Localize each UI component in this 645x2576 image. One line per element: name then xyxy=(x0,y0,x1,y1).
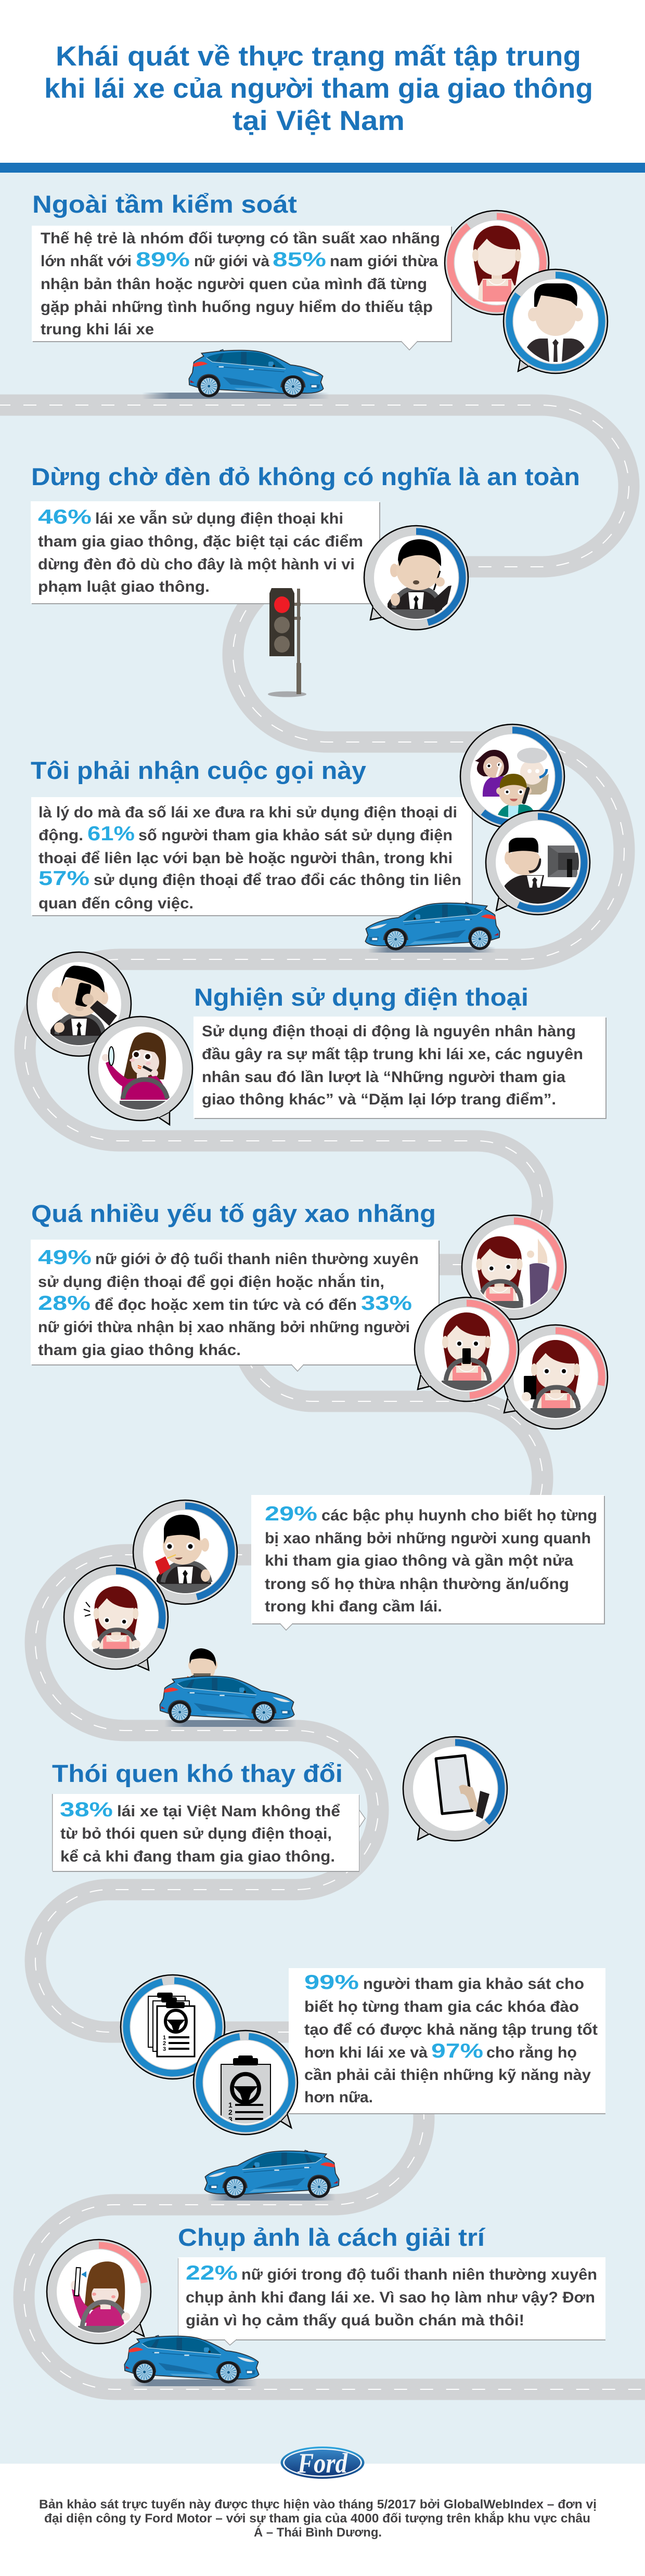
heading: Nghiện sử dụng điện thoại: Nghiện sử dụng điện thoại xyxy=(194,983,528,1011)
panel: text box 1: gặp phải những tình huống nguy hiểm do thiếu tập xyxy=(41,298,433,316)
panel: text box 1: nữ giới và xyxy=(194,253,269,270)
avatar: woman distracted by passenger 33% xyxy=(462,1215,566,1319)
panel: text box 2: tham gia giao thông, đặc biệt tại các điểm xyxy=(38,533,363,550)
panel: text box 5: tham gia giao thông khác. xyxy=(38,1342,241,1359)
panel: text box 7: 38% xyxy=(60,1799,113,1821)
panel: text box 5: để đọc hoặc xem tin tức và có đến xyxy=(95,1296,357,1313)
panel: text box 1: Thế hệ trẻ là nhóm đối tượng có tần suất xao nhãng xyxy=(41,230,440,247)
panel: text box 8: hơn khi lái xe và xyxy=(304,2044,428,2061)
panel: text box 8: hơn nữa. xyxy=(304,2089,373,2106)
avatar: office worker on phone 57% xyxy=(486,811,590,915)
footer background xyxy=(0,2464,645,2576)
avatar: clipboards 99% xyxy=(121,1975,225,2079)
panel: text box 1 xyxy=(32,226,452,350)
panel: text box 2: 46% xyxy=(38,506,92,528)
panel: text box 3: 61% xyxy=(87,823,135,845)
panel: text box 6: trong số họ thừa nhận thường ăn/uống xyxy=(265,1576,569,1593)
panel: text box 6: trong khi đang cầm lái. xyxy=(265,1598,442,1615)
panel: text box 4 xyxy=(194,1017,607,1119)
panel: text box 1: lớn nhất với xyxy=(41,253,132,270)
footer note: Á – Thái Bình Dương. xyxy=(254,2525,382,2540)
panel: text box 5: 28% xyxy=(38,1292,91,1315)
header band xyxy=(0,163,645,173)
avatar: family 61% xyxy=(460,724,564,828)
avatar: clipboard 97%: 1 xyxy=(228,2101,233,2109)
panel: text box 6 xyxy=(251,1495,605,1630)
panel: text box 1: 85% xyxy=(273,249,326,271)
avatar: woman 89% xyxy=(445,211,549,315)
panel: text box 5: nữ giới ở độ tuổi thanh niên thường xuyên xyxy=(95,1251,419,1268)
avatar: woman phone in hand 28% xyxy=(504,1325,608,1429)
panel: text box 2: lái xe vẫn sử dụng điện thoại khi xyxy=(95,510,343,527)
panel: text box 8: cần phải cải thiện những kỹ năng này xyxy=(304,2066,591,2084)
footer note xyxy=(39,2497,597,2540)
panel: text box 9: giản vì họ cảm thấy quá buồn chán mà thôi! xyxy=(186,2312,524,2329)
panel: text box 8: cho rằng họ xyxy=(486,2044,577,2061)
avatar: clipboards 99%: 3 xyxy=(163,2046,166,2052)
panel: text box 5 xyxy=(31,1240,440,1371)
panel: text box 4: nhân sau đó lần lượt là “Những người tham gia xyxy=(202,1069,565,1086)
heading: Ngoài tầm kiểm soát: Ngoài tầm kiểm soát xyxy=(32,190,297,218)
avatar: woman phone at mouth 49% xyxy=(415,1297,519,1401)
avatar: woman with lipstick xyxy=(88,1017,192,1125)
avatar: clipboard 97% xyxy=(194,2031,298,2135)
panel: text box 7: từ bỏ thói quen sử dụng điện thoại, xyxy=(60,1825,332,1842)
avatar: selfie woman 22% xyxy=(47,2240,151,2344)
panel: text box 9: nữ giới trong độ tuổi thanh niên thường xuyên xyxy=(241,2266,597,2283)
avatar: driver on phone 46% xyxy=(364,526,468,630)
car 2 xyxy=(365,902,500,953)
Ford logo: Ford xyxy=(297,2448,348,2479)
avatar: woman distracted 29% xyxy=(64,1565,168,1670)
panel: text box 2 xyxy=(31,501,380,604)
panel: text box 7: lái xe tại Việt Nam không thể xyxy=(117,1803,340,1820)
heading: Dừng chờ đèn đỏ: Dừng chờ đèn đỏ không có nghĩa là an toàn xyxy=(31,463,580,490)
avatar: clipboards 99%: 2 xyxy=(163,2040,166,2047)
panel: text box 9: 22% xyxy=(186,2262,238,2284)
panel: text box 4: đầu gây ra sự mất tập trung khi lái xe, các nguyên xyxy=(202,1046,583,1063)
icon: traffic light xyxy=(268,588,306,697)
panel: text box 1: 89% xyxy=(136,249,190,271)
panel: text box 4: giao thông khác” và “Dặm lại lớp trang điểm”. xyxy=(202,1091,556,1108)
panel: text box 8: 97% xyxy=(431,2040,483,2062)
panel: text box 6: bị xao nhãng bởi những người xung quanh xyxy=(265,1530,591,1547)
avatar: man 85% xyxy=(504,269,608,373)
heading: Tôi phải nhận cuộc gọi này: Tôi phải nhận cuộc gọi này xyxy=(31,757,366,784)
panel: text box 5: sử dụng điện thoại để gọi điện hoặc nhắn tin, xyxy=(38,1273,384,1291)
panel: text box 5: 33% xyxy=(361,1292,412,1315)
avatar: phone 38% xyxy=(403,1737,507,1841)
title xyxy=(44,41,593,136)
panel: text box 8 xyxy=(289,1968,605,2114)
heading: Chụp ảnh là cách giải trí: Chụp ảnh là cách giải trí xyxy=(178,2223,486,2251)
car 5 xyxy=(124,2335,259,2386)
panel: text box 6: khi tham gia giao thông và gần một nửa xyxy=(265,1552,573,1569)
panel: text box 6: 29% xyxy=(265,1503,317,1525)
avatar: clipboard 97%: 3 xyxy=(228,2115,233,2124)
panel: text box 9 xyxy=(178,2257,605,2345)
panel: text box 7: kể cả khi đang tham gia giao thông. xyxy=(60,1848,335,1865)
title: tại Việt Nam xyxy=(233,106,405,136)
panel: text box 8: người tham gia khảo sát cho xyxy=(363,1975,584,1993)
title: khi lái xe của người tham gia giao thông xyxy=(44,73,593,104)
panel: text box 1: nam giới thừa xyxy=(330,253,438,270)
panel: text box 3: là lý do mà đa số lái xe đưa ra khi sử dụng điện thoại di xyxy=(38,804,457,821)
footer note: Bản khảo sát trực tuyến này được thực hiện vào tháng 5/2017 bởi GlobalWebIndex – đơn vị xyxy=(39,2497,597,2512)
panel: text box 3 xyxy=(31,797,473,916)
car 4 xyxy=(204,2150,339,2201)
panel: text box 3: 57% xyxy=(38,867,89,890)
panel: text box 3: sử dụng điện thoại để trao đổi các thông tin liên xyxy=(94,871,461,889)
panel: text box 1: trung khi lái xe xyxy=(41,321,154,338)
heading: Quá nhiều yếu tố gây xao nhãng: Quá nhiều yếu tố gây xao nhãng xyxy=(31,1200,436,1227)
panel: text box 5: 49% xyxy=(38,1246,92,1269)
avatar: man on phone xyxy=(27,952,131,1056)
panel: text box 2: dừng đèn đỏ dù cho đây là một hành vi vi xyxy=(38,556,355,573)
panel: text box 3: thoại để liên lạc với bạn bè hoặc người thân, trong khi xyxy=(38,850,453,867)
panel: text box 8: biết họ từng tham gia các khóa đào xyxy=(304,1998,579,2015)
panel: text box 3: số người tham gia khảo sát sử dụng điện xyxy=(138,827,453,844)
panel: text box 3: động. xyxy=(38,827,83,844)
man in car xyxy=(187,1648,218,1689)
car 1 xyxy=(142,349,329,399)
car 3 xyxy=(160,1675,296,1727)
panel: text box 8: 99% xyxy=(304,1971,359,1994)
panel: text box 1: nhận bản thân hoặc người quen của mình đã từng xyxy=(41,276,427,293)
panel: text box 2: phạm luật giao thông. xyxy=(38,578,210,595)
panel: text box 9: chụp ảnh khi đang lái xe. Vì sao họ làm như vậy? Đơn xyxy=(186,2289,595,2306)
avatar: man with drink xyxy=(133,1500,237,1604)
winding road xyxy=(0,405,645,2389)
heading: Thói quen khó thay đổi: Thói quen khó thay đổi xyxy=(52,1760,343,1787)
panel: text box 7 xyxy=(52,1794,365,1872)
avatar: clipboard 97%: 2 xyxy=(228,2108,233,2116)
panel: text box 3: quan đến công việc. xyxy=(38,895,194,912)
title: Khái quát về thực trạng mất tập trung xyxy=(56,41,581,72)
panel: text box 4: Sử dụng điện thoại di động là nguyên nhân hàng xyxy=(202,1023,576,1040)
panel: text box 6: các bậc phụ huynh cho biết họ từng xyxy=(321,1507,597,1524)
panel: text box 8: tạo để có được khả năng tập trung tốt xyxy=(304,2021,598,2038)
avatar: clipboards 99%: 1 xyxy=(163,2035,166,2041)
footer note: đại diện công ty Ford Motor – với sự tham gia của 4000 đối tượng trên khắp khu vực châu xyxy=(44,2511,590,2526)
panel: text box 5: nữ giới thừa nhận bị xao nhãng bởi những người xyxy=(38,1319,410,1336)
Ford logo xyxy=(281,2447,364,2479)
